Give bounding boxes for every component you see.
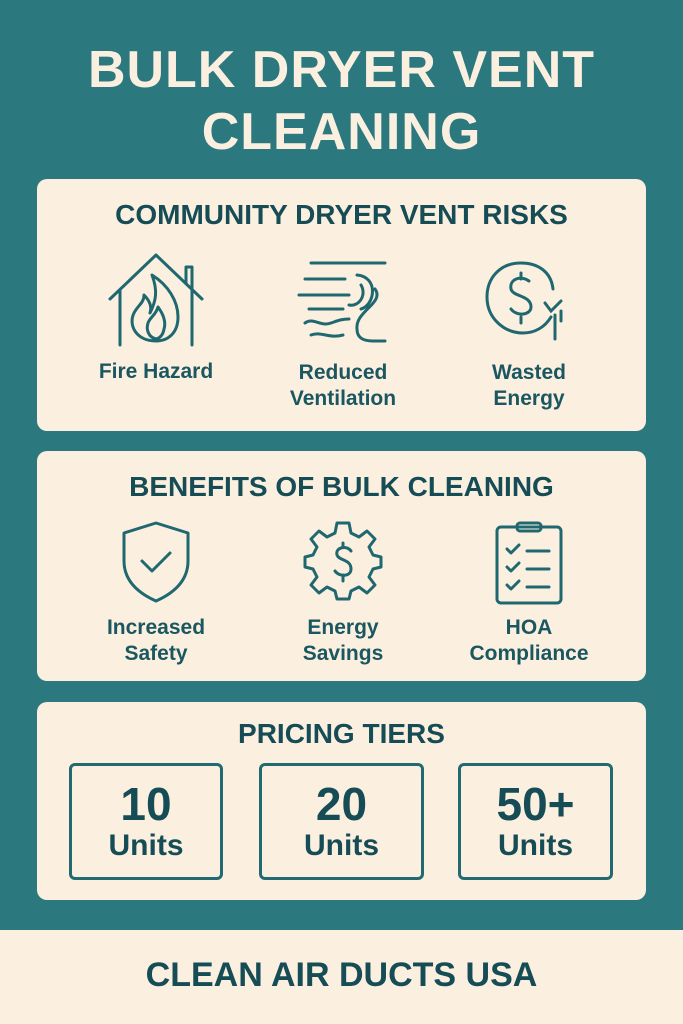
label: Wasted — [492, 361, 566, 384]
tier: 50+ units — [458, 763, 613, 880]
heading: pricing: PRICING TIERS — [238, 718, 445, 749]
item: increased safety — [107, 522, 205, 665]
icon: gear dollar — [304, 522, 382, 600]
label — [492, 361, 566, 410]
heading: benefits: BENEFITS OF BULK CLEANING — [129, 471, 554, 502]
panel: risks — [37, 179, 646, 431]
label — [290, 361, 396, 410]
tier: 20 units — [259, 763, 424, 880]
label: Ventilation — [290, 387, 396, 410]
tier: 10 units — [69, 763, 223, 880]
heading: risks: COMMUNITY DRYER VENT RISKS — [115, 199, 568, 230]
tier: 10 units: 10 — [120, 778, 172, 830]
icon: house fire — [108, 253, 204, 346]
icon: dollar cycle — [486, 262, 563, 340]
icon: shield check — [122, 522, 190, 602]
footer: CLEAN AIR DUCTS USA — [146, 956, 537, 994]
tier: 50+ units: Units — [498, 829, 573, 862]
label: Compliance — [469, 642, 589, 665]
icon: airflow — [298, 262, 386, 342]
panel: benefits — [37, 451, 646, 681]
label — [469, 616, 589, 665]
panel: pricing — [37, 702, 646, 900]
label: Savings — [303, 642, 383, 665]
label: Energy — [307, 616, 379, 639]
label — [303, 616, 383, 665]
tier: 20 units: Units — [304, 829, 379, 862]
title: CLEANING — [202, 103, 481, 161]
label — [107, 616, 205, 665]
item: wasted energy — [486, 262, 566, 410]
tier: 50+ units: 50+ — [496, 778, 575, 830]
label: Increased — [107, 616, 205, 639]
label: HOA — [506, 616, 552, 639]
label: Safety — [124, 642, 188, 665]
label: Fire Hazard — [99, 360, 213, 383]
footer — [0, 930, 683, 1024]
title — [88, 41, 595, 161]
item: fire hazard — [99, 253, 213, 383]
title: BULK DRYER VENT — [88, 41, 595, 99]
item: energy savings — [303, 522, 383, 665]
tier: 20 units: 20 — [316, 778, 367, 830]
label: Energy — [493, 387, 565, 410]
tier: 10 units: Units — [108, 829, 184, 862]
label: Reduced — [299, 361, 387, 384]
item: HOA compliance — [469, 522, 589, 665]
item: reduced ventilation — [290, 262, 396, 410]
icon: clipboard checklist — [496, 522, 562, 604]
